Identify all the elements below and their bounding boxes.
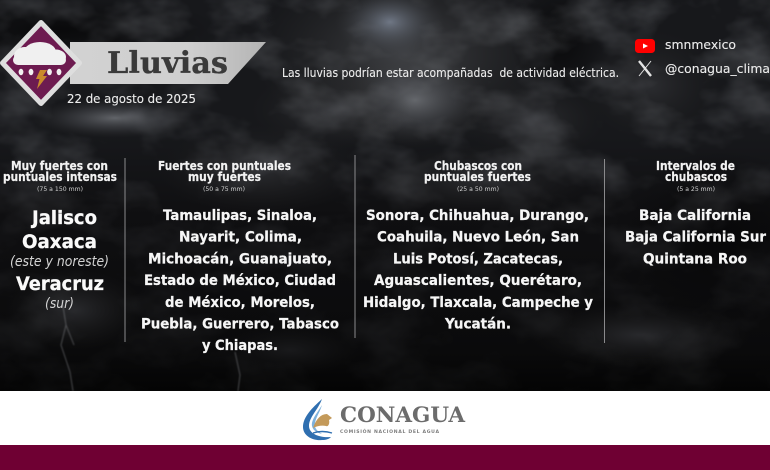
states: muy fuertes: (sur) [45,296,74,312]
heading: muy fuertes: puntuales intensas [3,170,117,184]
heading: fuertes [158,159,291,193]
note: electrical activity: Las lluvias podrían estar acompañadas de actividad eléctrica. [282,66,619,80]
states: fuertes: de México, Morelos, [165,295,315,311]
panel: fuertes [141,159,339,354]
states: fuertes: Tamaulipas, Sinaloa, [163,208,317,224]
states: fuertes: Michoacán, Guanajuato, [148,251,332,267]
heading: intervalos: Intervalos de [656,159,735,173]
icon: storm diamond [2,22,80,104]
heading: fuertes: Fuertes con puntuales [158,159,291,173]
heading: Lluvias: Lluvias [107,46,228,81]
heading: fuertes: (50 a 75 mm) [203,185,245,193]
states: chubascos [363,208,593,332]
states: muy fuertes: (este y noreste) [10,254,109,270]
states: chubascos: Coahuila, Nuevo León, San [377,230,579,246]
panel: title band [70,42,266,84]
social: youtube handle: smnmexico [665,38,736,52]
heading: chubascos: puntuales fuertes [424,170,531,184]
lightning bolts [61,300,240,391]
divider lines [125,155,604,343]
states: intervalos: Quintana Roo [643,251,747,267]
icon: water and eagle [303,399,332,440]
heading: muy fuertes: (75 a 150 mm) [37,185,83,193]
states: muy fuertes [10,207,109,312]
logo: CONAGUA [303,399,466,440]
heading: muy fuertes: Muy fuertes con [11,159,108,173]
heading: chubascos [424,159,531,193]
states: intervalos: Baja California Sur [625,230,766,246]
states: intervalos [625,208,766,267]
states: fuertes [141,208,339,354]
heading: chubascos: Chubascos con [434,159,522,173]
panel: intervalos [625,159,766,267]
states: chubascos: Yucatán. [444,316,511,332]
panel: chubascos [363,159,593,332]
states: chubascos: Sonora, Chihuahua, Durango, [366,208,589,224]
panel: muy fuertes [3,159,117,312]
states: chubascos: Luis Potosí, Zacatecas, [393,251,563,267]
icon: youtube [635,39,655,53]
states: chubascos: Aguascalientes, Querétaro, [374,273,582,289]
states: muy fuertes: Oaxaca [22,231,97,253]
date: 22 de agosto de 2025 [67,92,196,106]
footer band [0,391,770,445]
footer maroon bar [0,445,770,470]
states: fuertes: Nayarit, Colima, [179,230,302,246]
heading: intervalos: chubascos [665,170,727,184]
heading: intervalos: (5 a 25 mm) [677,185,715,193]
wordmark: CONAGUA [340,402,466,427]
states: muy fuertes: Jalisco [30,207,97,229]
states: fuertes: y Chiapas. [202,338,278,354]
tagline: COMISIÓN NACIONAL DEL AGUA [340,428,439,435]
states: fuertes: Puebla, Guerrero, Tabasco [141,316,339,332]
heading: chubascos: (25 a 50 mm) [457,185,499,193]
heading: fuertes: muy fuertes [188,170,261,184]
states: muy fuertes: Veracruz [16,273,104,295]
icon: X [639,61,651,76]
social: X handle: @conagua_clima [665,62,770,76]
states: fuertes: Estado de México, Ciudad [144,273,336,289]
heading: intervalos [656,159,735,193]
states: chubascos: Hidalgo, Tlaxcala, Campeche y [363,295,593,311]
heading: muy fuertes [3,159,117,193]
states: intervalos: Baja California [639,208,751,224]
